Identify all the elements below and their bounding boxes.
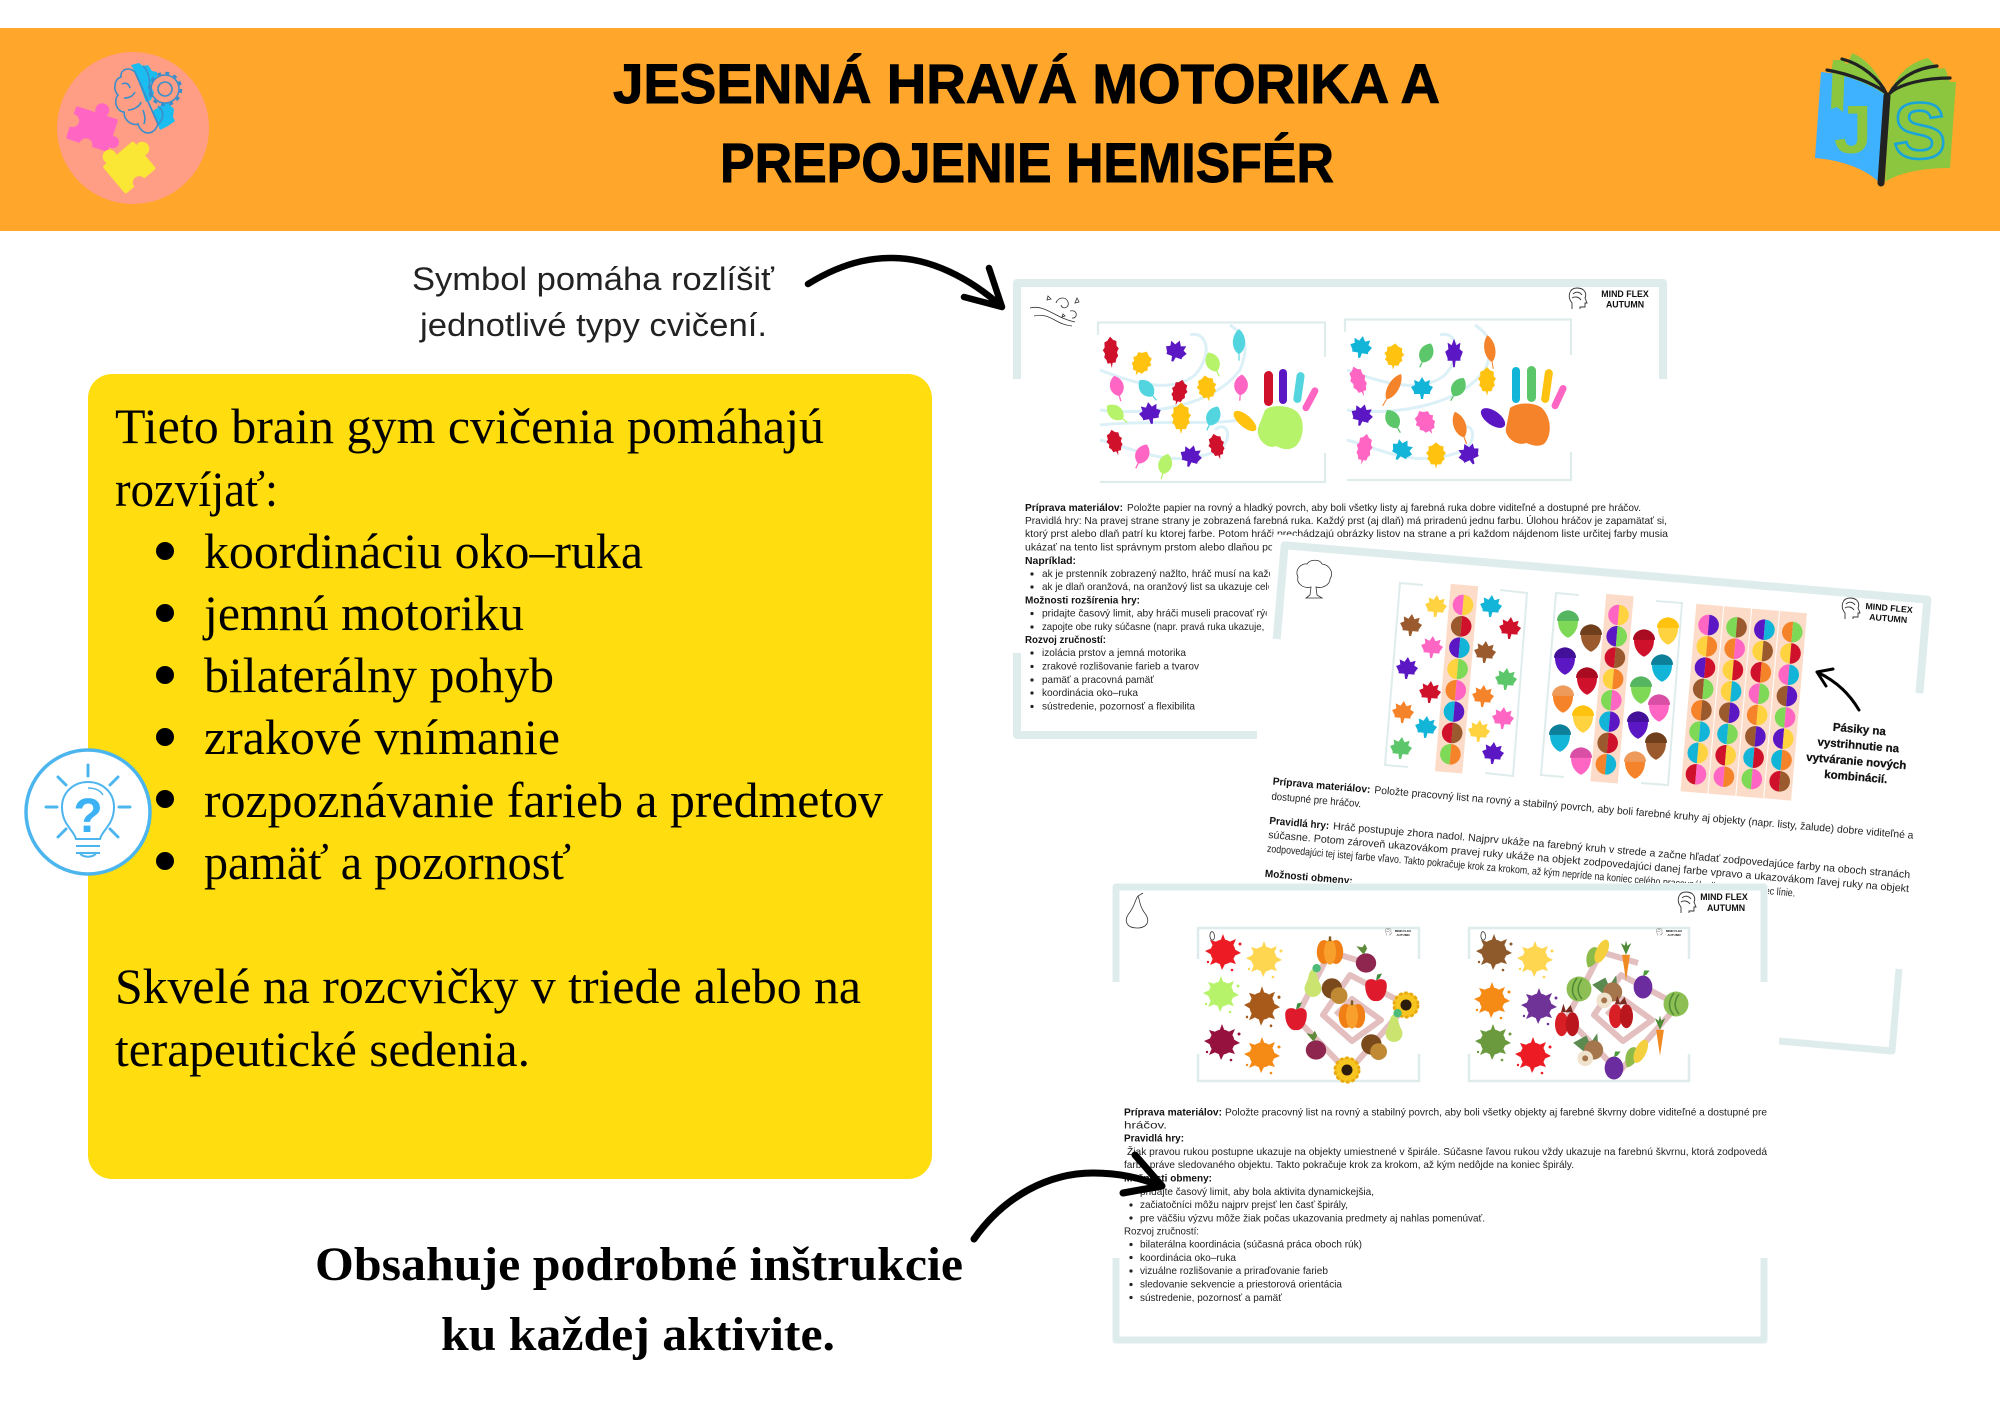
icon: pear <box>1126 893 1148 928</box>
label: mind flex autumn <box>1700 892 1748 913</box>
instructions: worksheet 3: Pravidlá hry: <box>1124 1132 1184 1144</box>
instructions: worksheet 2: Hráč postupuje zhora nadol. Najprv ukáže na farebný kruh v strede a začne hľadať zodpovedajúce farby na oboch stranách <box>1333 820 1911 881</box>
instructions: worksheet 1: Položte papier na rovný a hladký povrch, aby boli všetky listy aj farebná ruka dobre viditeľné a dostupné pre hráčov. <box>1127 502 1641 514</box>
instructions: worksheet 2: Položte pracovný list na rovný a stabilný povrch, aby boli farebné kruhy aj objekty (napr. listy, žalude) dobre viditeľné a <box>1374 784 1914 842</box>
title: PREPOJENIE HEMISFÉR <box>720 131 1334 194</box>
sheet: right hand <box>1345 320 1571 480</box>
label: mind flex autumn <box>1601 289 1649 310</box>
sheet: left blots and spiral: MIND FLEX <box>1395 929 1411 933</box>
icon: open book logo JS: S <box>1893 86 1946 175</box>
instructions: worksheet 1: ktorý prst alebo dlaň patrí ku ktorej farbe. Potom hráči prechádzajú obrázky listov na strane a pri každom nájdenom liste určitej farby musia <box>1025 528 1668 540</box>
icon: tree <box>1297 560 1332 598</box>
icon: lightbulb with question mark <box>26 750 150 874</box>
instructions: worksheet 3 <box>1124 1106 1767 1304</box>
benefits text: jemnú motoriku <box>202 585 524 641</box>
label: mind flex autumn: MIND FLEX <box>1601 289 1649 299</box>
label: mind flex autumn <box>1864 601 1913 625</box>
benefits text: bilaterálny pohyb <box>204 647 554 703</box>
instructions: worksheet 2: Možnosti obmeny: <box>1264 868 1353 887</box>
panel: yellow benefits box <box>88 374 932 1179</box>
label: mind flex autumn: MIND FLEX <box>1700 892 1748 902</box>
benefits text: rozpoznávanie farieb a predmetov <box>204 772 883 828</box>
callout: strips note: Pásiky na <box>1832 722 1887 738</box>
label: mind flex autumn: AUTUMN <box>1606 300 1644 310</box>
instructions: worksheet 3: Príprava materiálov: <box>1124 1106 1222 1118</box>
title: JESENNÁ HRAVÁ MOTORIKA A <box>613 52 1440 115</box>
instructions: worksheet 3: Žiak pravou rukou postupne ukazuje na objekty umiestnené v špirále. Súčasne ľavou rukou vždy ukazuje na farebnú škvrnu, ktorá zodpovedá <box>1127 1145 1767 1158</box>
callout: strips note: vystrihnutie na <box>1817 737 1900 755</box>
instructions: worksheet 1 <box>1025 502 1668 712</box>
benefits text: Skvelé na rozcvičky v triede alebo na <box>115 958 861 1014</box>
instructions: worksheet 1: Možnosti rozšírenia hry: <box>1025 594 1140 606</box>
icon: lightbulb with question mark: ? <box>73 790 103 843</box>
instructions: worksheet 1: pridajte časový limit, aby hráči museli pracovať rýchlejšie, <box>1042 608 1302 620</box>
instructions: worksheet 2 <box>1264 776 1914 934</box>
sheet: right blots and spiral: AUTUMN <box>1668 933 1680 937</box>
instructions: worksheet 3: Rozvoj zručností: <box>1124 1226 1199 1238</box>
sheet: left blots and spiral <box>1198 928 1419 1083</box>
sheet: right blots and spiral <box>1469 928 1689 1081</box>
instructions: worksheet 3: bilaterálna koordinácia (súčasná práca oboch rúk) <box>1140 1238 1362 1250</box>
instructions: worksheet 3: Položte pracovný list na rovný a stabilný povrch, aby boli všetky objekty aj farebné škvrny dobre viditeľné a dostupné pre <box>1225 1106 1767 1118</box>
instructions: worksheet 3: Možnosti obmeny: <box>1124 1172 1212 1184</box>
caption: symbol explanation <box>412 261 775 343</box>
panel: worksheet 2 strips with circles <box>1236 534 1942 1060</box>
instructions: worksheet 1: izolácia prstov a jemná motorika <box>1042 647 1186 659</box>
benefits text: zrakové vnímanie <box>204 709 560 765</box>
instructions: worksheet 3: pridajte časový limit, aby bola aktivita dynamickejšia, <box>1140 1186 1374 1198</box>
icon: open book logo JS: J <box>1834 92 1872 168</box>
sheet: left blots and spiral: AUTUMN <box>1396 933 1410 937</box>
instructions: worksheet 3: farbu práve sledovaného objektu. Takto pokračuje krok za krokom, až kým nedôjde na koniec špirály. <box>1124 1159 1574 1171</box>
icon: open book logo JS <box>1815 53 1956 183</box>
sheet: acorns and strip <box>1541 593 1682 785</box>
callout: strips note: vytváranie nových <box>1806 752 1907 772</box>
header banner <box>0 28 2000 231</box>
icon: head <box>1569 288 1587 309</box>
sheet: maple leaves and strip <box>1385 583 1527 776</box>
instructions: worksheet 3: hráčov. <box>1124 1120 1167 1132</box>
benefits text: Tieto brain gym cvičenia pomáhajú <box>115 398 824 454</box>
sheet: left hand <box>1098 322 1325 482</box>
panel: worksheet 3 spiral <box>1112 883 1768 1345</box>
instructions: worksheet 1: sústredenie, pozornosť a flexibilita <box>1042 700 1195 712</box>
panel: worksheet 1 hand and leaves <box>1017 283 1668 735</box>
benefits text: terapeutické sedenia. <box>115 1021 530 1077</box>
caption: symbol explanation: jednotlivé typy cvičení. <box>419 307 767 343</box>
instructions: worksheet 3: sledovanie sekvencie a priestorová orientácia <box>1140 1278 1342 1290</box>
callout: strips note: kombinácií. <box>1824 769 1888 786</box>
instructions: worksheet 2: súčasne. Potom zároveň ukazovákom pravej ruky ukáže na objekt zodpovedajúci danej farbe vpravo a ukazovákom ľavej ruky na objekt <box>1268 829 1910 895</box>
benefits text: pamäť a pozornosť <box>204 834 571 890</box>
icon: brain and puzzle pieces <box>57 52 209 204</box>
instructions: worksheet 3: pre väčšiu výzvu môže žiak počas ukazovania predmety aj nahlas pomenúvať. <box>1140 1212 1485 1224</box>
benefits text: koordináciu oko–ruka <box>204 523 643 579</box>
icon: head <box>1842 598 1860 619</box>
caption: symbol explanation: Symbol pomáha rozlíšiť <box>412 261 775 297</box>
instructions: worksheet 1: Príprava materiálov: <box>1025 502 1123 514</box>
label: mind flex autumn: AUTUMN <box>1707 903 1745 913</box>
callout: strips note <box>1806 722 1907 786</box>
instructions: worksheet 3: vizuálne rozlišovanie a priraďovanie farieb <box>1140 1265 1328 1277</box>
title <box>613 52 1440 194</box>
label: mind flex autumn: AUTUMN <box>1869 612 1908 625</box>
instructions: worksheet 1: Rozvoj zručností: <box>1025 634 1106 646</box>
icon: wind swirl <box>1030 296 1079 326</box>
instructions: worksheet 3: koordinácia oko–ruka <box>1140 1252 1236 1264</box>
instructions: worksheet 2: dostupné pre hráčov. <box>1271 791 1362 810</box>
instructions: worksheet 1: Pravidlá hry: Na pravej strane strany je zobrazená farebná ruka. Každý prst (aj dlaň) má priradenú jednu farbu. Úlohou hráčov je zapamätať si, <box>1025 514 1667 527</box>
label: mind flex autumn: MIND FLEX <box>1865 601 1913 615</box>
callout: detailed instructions: ku každej aktivite. <box>441 1308 835 1361</box>
icon: head <box>1678 892 1696 913</box>
sheet: right blots and spiral: MIND FLEX <box>1666 929 1682 933</box>
instructions: worksheet 1: koordinácia oko–ruka <box>1042 687 1138 699</box>
instructions: worksheet 2: zodpovedajúci tej istej farbe vľavo. Takto pokračuje krok za krokom, až kým nepríde na koniec celého pracovného listu a na koniec línie. <box>1267 843 1796 900</box>
frame corner <box>1779 969 1899 1051</box>
benefits text: rozvíjať: <box>115 461 278 517</box>
instructions: worksheet 3: sústredenie, pozornosť a pamäť <box>1140 1292 1283 1304</box>
arrow: to symbol <box>808 258 1002 307</box>
callout: detailed instructions <box>315 1238 963 1361</box>
arrow: to instructions <box>974 1155 1162 1239</box>
instructions: worksheet 3: začiatočníci môžu najprv prejsť len časť špirály, <box>1140 1199 1348 1211</box>
instructions: worksheet 1: ak je prstenník zobrazený nažlto, hráč musí na každom žltom liste ukázať prstenníkom, <box>1042 568 1430 580</box>
cut-out strips <box>1681 604 1807 801</box>
benefits text <box>115 398 883 1077</box>
instructions: worksheet 1: zapojte obe ruky súčasne (napr. pravá ruka ukazuje, ľavá drží papier). <box>1042 621 1339 633</box>
instructions: worksheet 1: Napríklad: <box>1025 555 1076 567</box>
instructions: worksheet 1: ukázať na tento list správnym prstom alebo dlaňou podľa farby listu. <box>1025 542 1339 554</box>
instructions: worksheet 1: pamäť a pracovná pamäť <box>1042 674 1155 686</box>
instructions: worksheet 1: ak je dlaň oranžová, na oranžový list sa ukazuje celou dlaňou. <box>1042 581 1314 593</box>
arrow: to strips <box>1817 669 1859 710</box>
instructions: worksheet 1: zrakové rozlišovanie farieb a tvarov <box>1042 660 1200 672</box>
instructions: worksheet 2: Príprava materiálov: <box>1272 776 1371 796</box>
instructions: worksheet 2: Pravidlá hry: <box>1269 815 1330 832</box>
callout: detailed instructions: Obsahuje podrobné inštrukcie <box>315 1238 963 1291</box>
